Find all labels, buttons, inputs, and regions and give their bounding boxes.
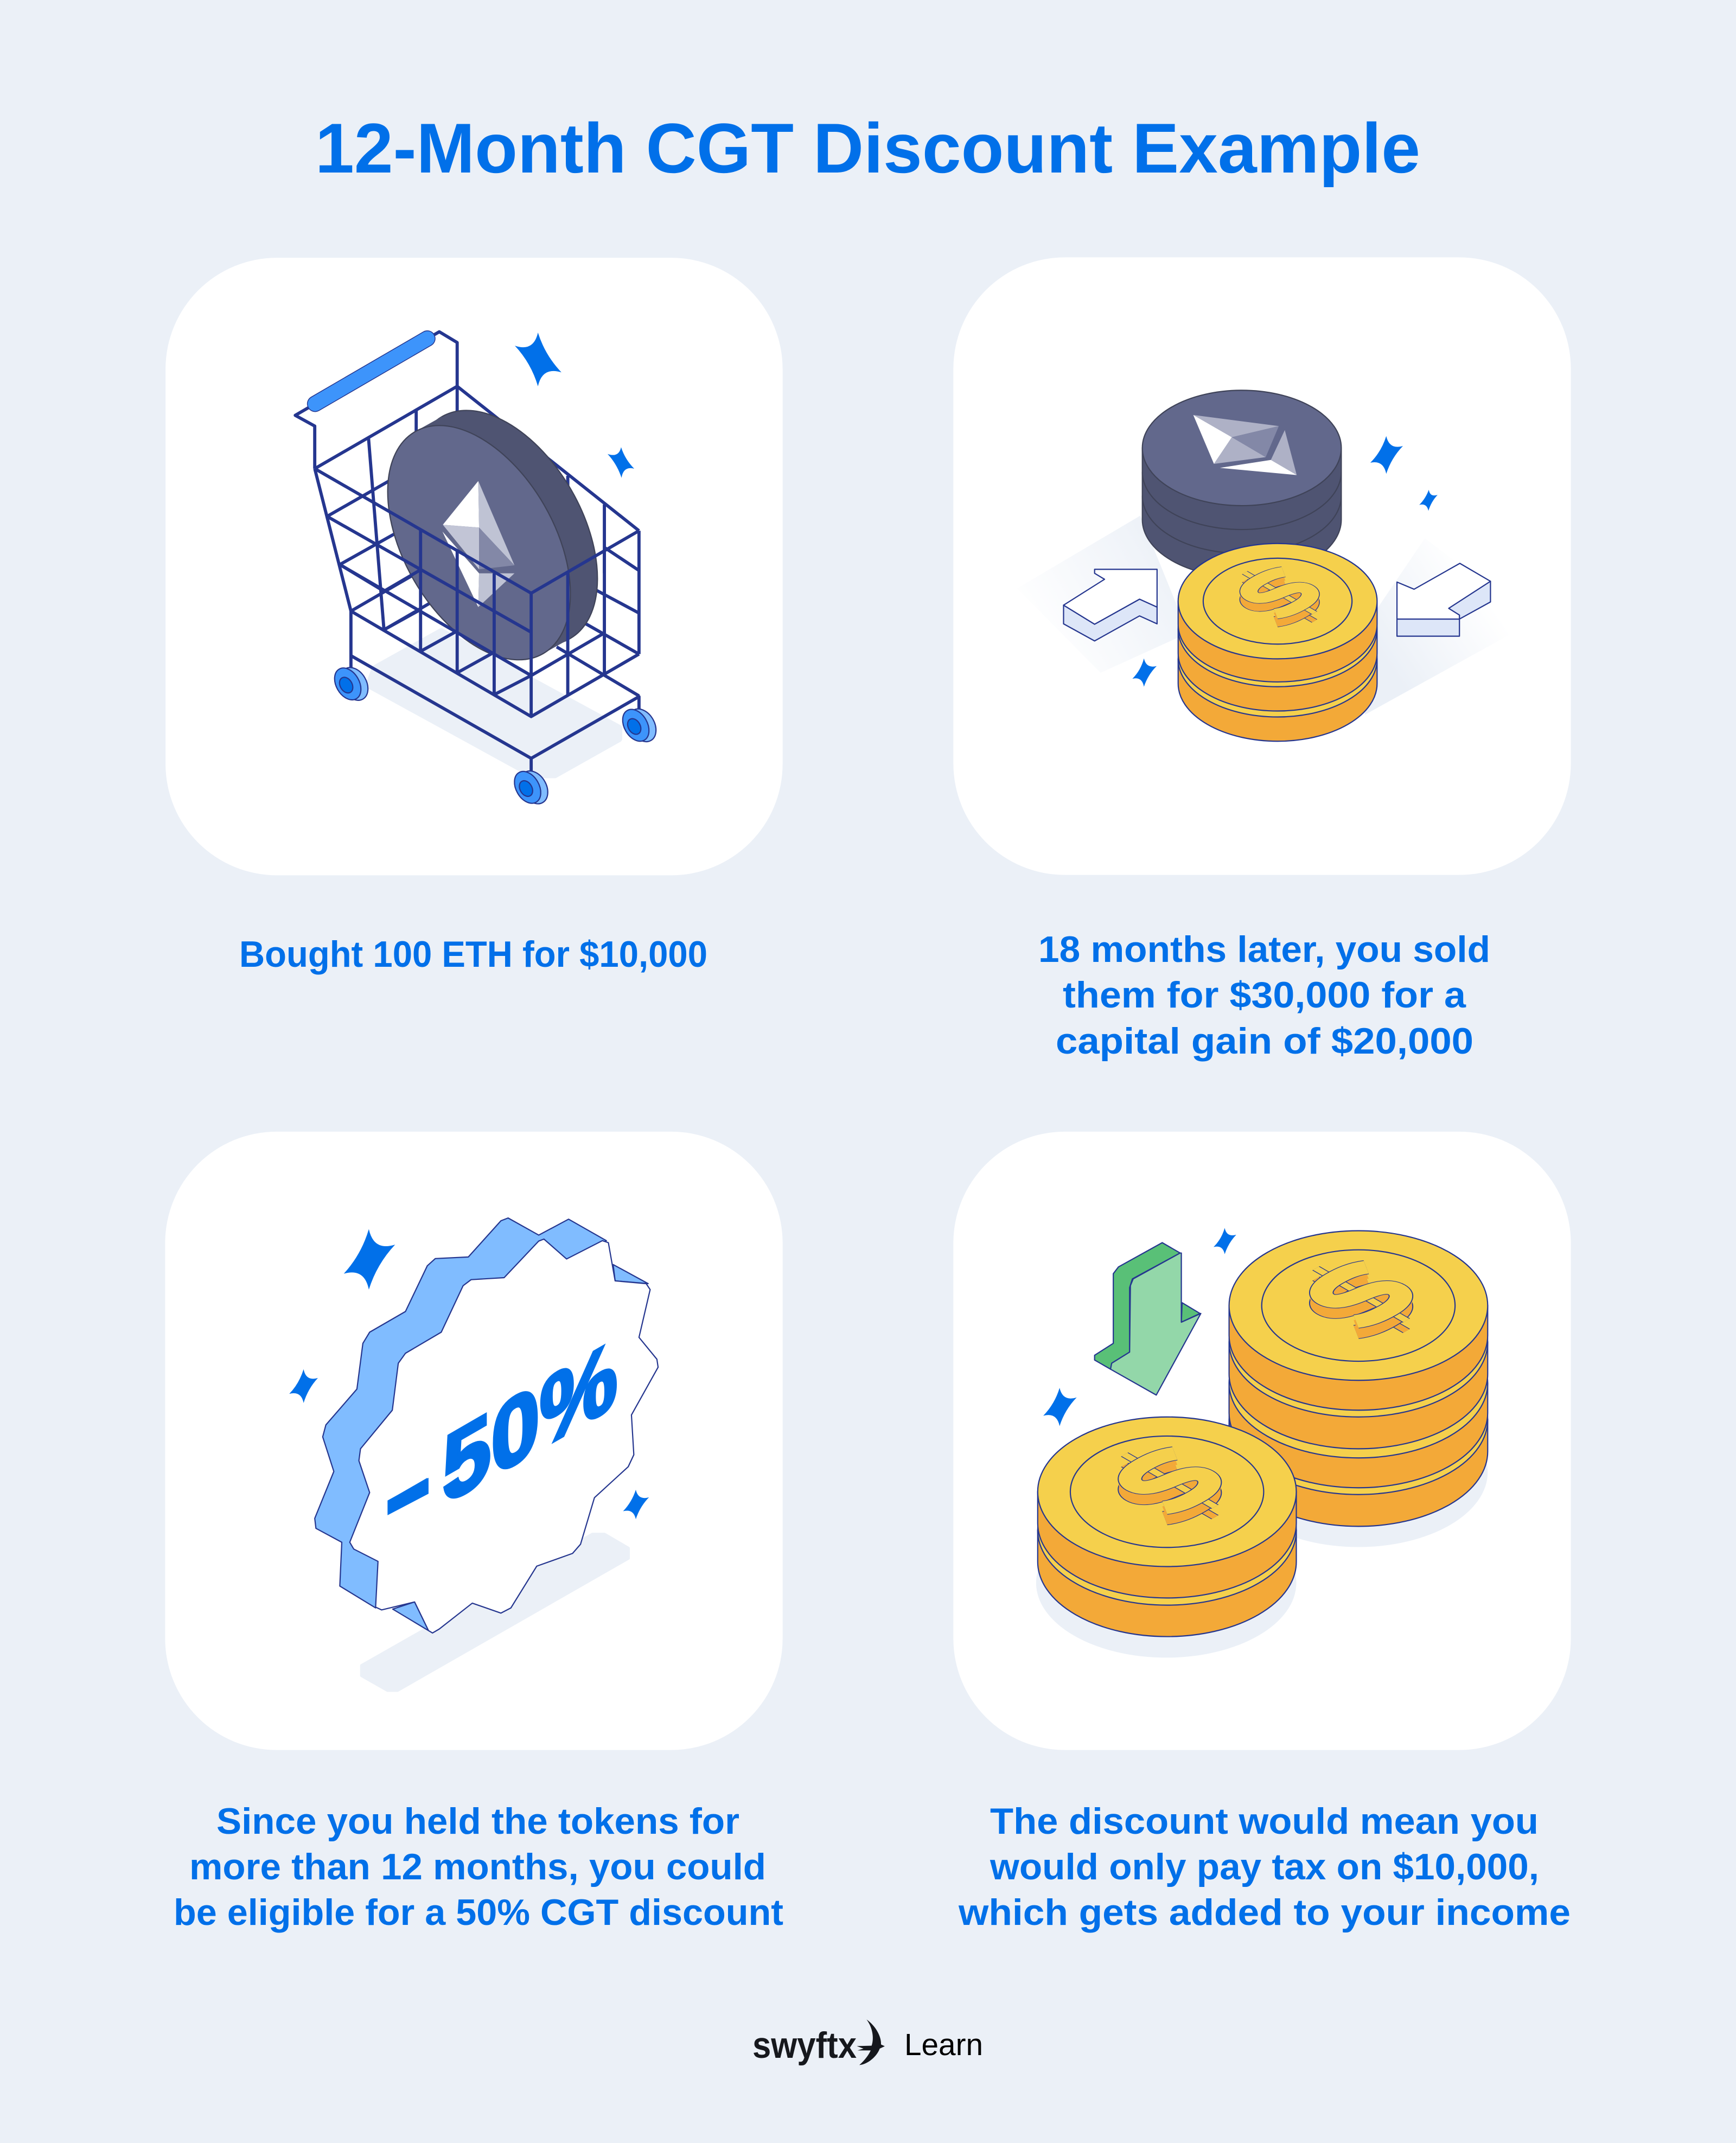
dollar sign small stack [1099,1439,1241,1532]
caption 2: 18 months later, you sold [1038,929,1490,970]
caption 2: capital gain of $20,000 [1056,1021,1473,1062]
logo: swyftx Learn: swyftx [752,2025,857,2066]
card background [165,1132,783,1750]
sparkle small [1419,490,1438,511]
badge side [315,1218,648,1631]
shadow small stack [1036,1508,1297,1657]
panel: shopping cart with ETH coin [165,258,783,875]
small coin stack [1038,1417,1297,1637]
floor shadow right [1347,538,1534,715]
caption 4: The discount would mean you [990,1801,1539,1842]
cart handle [315,339,427,404]
logo: swyftx Learn: Learn [904,2027,983,2062]
arrow pointing left-down [1397,563,1490,636]
sparkle large [1370,436,1403,474]
sparkle large [344,1229,395,1290]
caption 4: would only pay tax on $10,000, [990,1846,1539,1887]
panel: reduced coin stacks [953,1132,1571,1750]
caption 2 [1038,929,1490,1062]
card background [953,257,1571,875]
cart front wires [315,469,639,717]
discount figure: – [387,1423,429,1553]
shadow large stack [1229,1398,1488,1547]
card background [165,258,783,875]
caption 3: more than 12 months, you could [189,1846,766,1887]
large coin stack [1229,1230,1488,1526]
green down arrow [1095,1242,1201,1395]
discount figure: 50% [443,1318,617,1526]
ETH logo [1194,415,1297,475]
wheel: front [509,766,553,809]
caption 3: Since you held the tokens for [216,1801,739,1842]
ETH coin [350,379,635,691]
arrow pointing right-up [1063,569,1157,641]
sparkle bottom [1132,659,1157,687]
caption 4: which gets added to your income [958,1892,1571,1933]
icon: swift bird [857,2019,885,2065]
caption 3: be eligible for a 50% CGT discount [174,1892,783,1933]
badge front [350,1239,658,1633]
ETH coin stack [1143,390,1341,577]
gold coin stack [1178,544,1377,741]
floor shadow [369,632,618,774]
caption 2: them for $30,000 for a [1063,974,1466,1016]
sparkle large [515,333,561,386]
sparkle small [608,447,634,478]
caption 1: Bought 100 ETH for $10,000 [239,934,707,975]
discount figure [387,1318,617,1553]
sparkle top [1214,1228,1236,1254]
floor shadow [362,1534,628,1691]
sparkle left [289,1369,318,1403]
panel: 50% discount badge [165,1132,783,1750]
caption 4 [958,1801,1571,1933]
caption 3 [174,1801,783,1933]
card background [953,1132,1571,1750]
dollar sign [1224,561,1335,633]
cart rear wires [295,332,639,772]
dollar sign large stack [1290,1253,1432,1346]
wheel: left [329,662,374,705]
title: 12-Month CGT Discount Example [315,109,1420,188]
sparkle right [623,1490,649,1519]
panel: swapping ETH for dollars [953,257,1571,875]
wheel: right [617,704,662,747]
floor shadow left [1017,515,1188,673]
logo: swyftx Learn [752,2019,983,2066]
sparkle left [1043,1388,1077,1426]
